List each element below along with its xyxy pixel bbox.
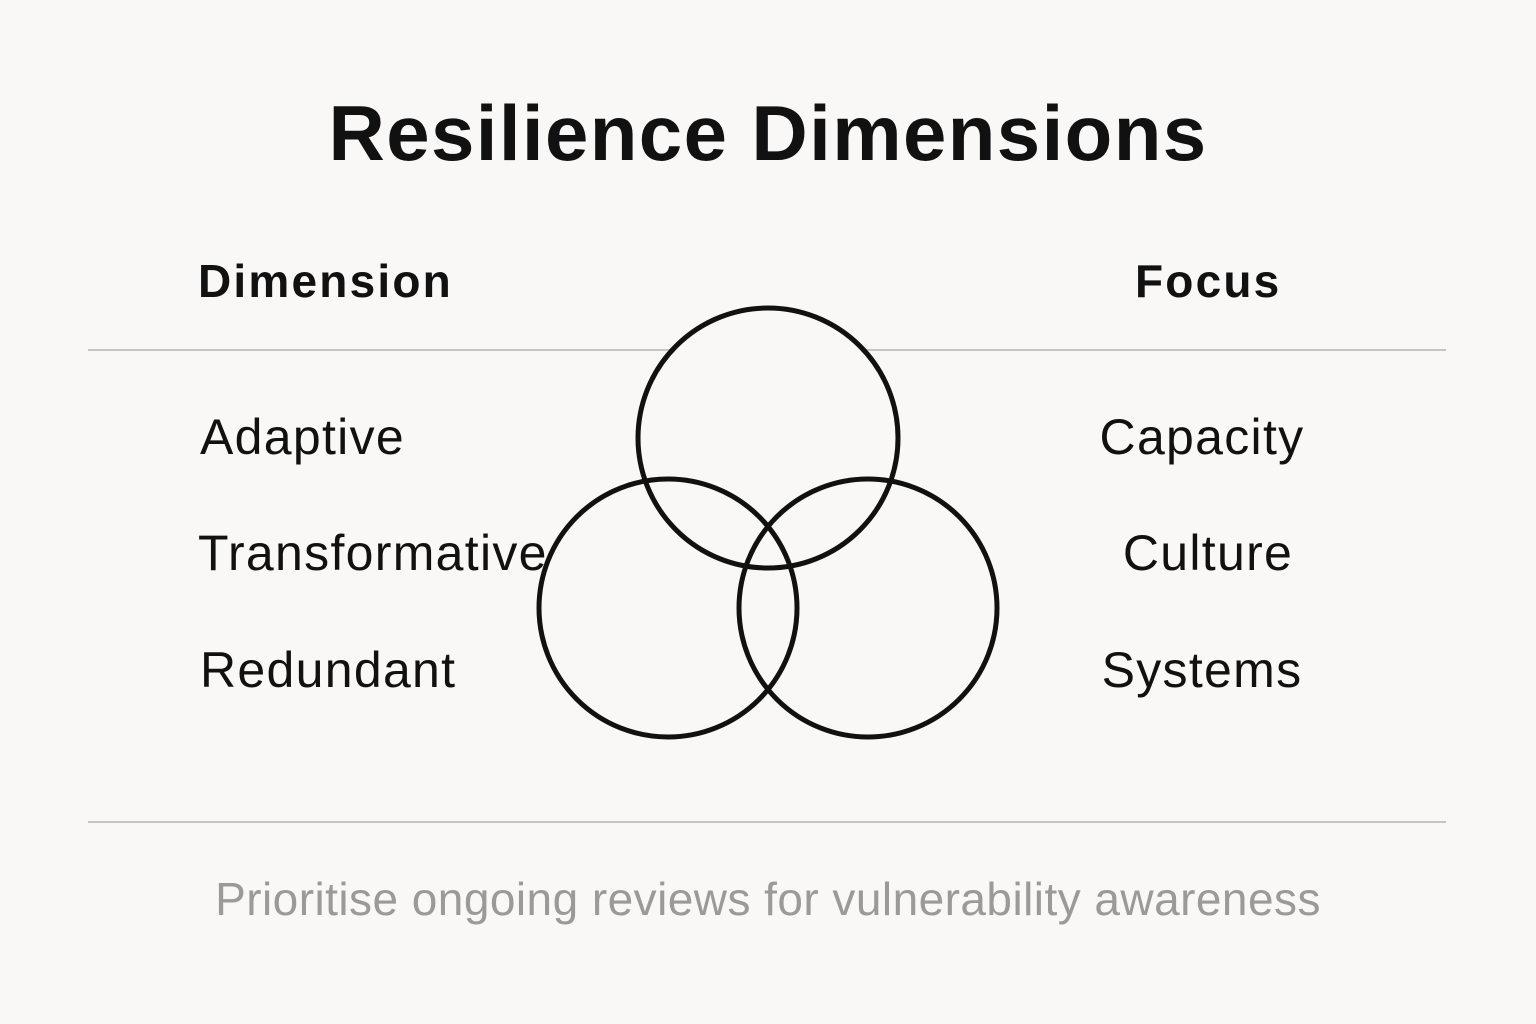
focus list <box>1100 409 1304 698</box>
dimension: transformative: Transformative <box>198 525 548 581</box>
circle: bottom left <box>539 479 797 737</box>
header: dimension: Dimension <box>198 255 453 307</box>
header: focus: Focus <box>1135 255 1281 307</box>
circle: bottom right <box>739 479 997 737</box>
title: Resilience Dimensions <box>328 89 1208 177</box>
focus: culture: Culture <box>1123 525 1293 581</box>
footer note: Prioritise ongoing reviews for vulnerability awareness <box>215 873 1321 925</box>
focus: systems: Systems <box>1102 642 1302 698</box>
circle: top <box>638 308 898 568</box>
focus: capacity: Capacity <box>1100 409 1304 465</box>
dimension list <box>198 409 548 698</box>
dimension: adaptive: Adaptive <box>200 409 405 465</box>
dimension: redundant: Redundant <box>200 642 456 698</box>
